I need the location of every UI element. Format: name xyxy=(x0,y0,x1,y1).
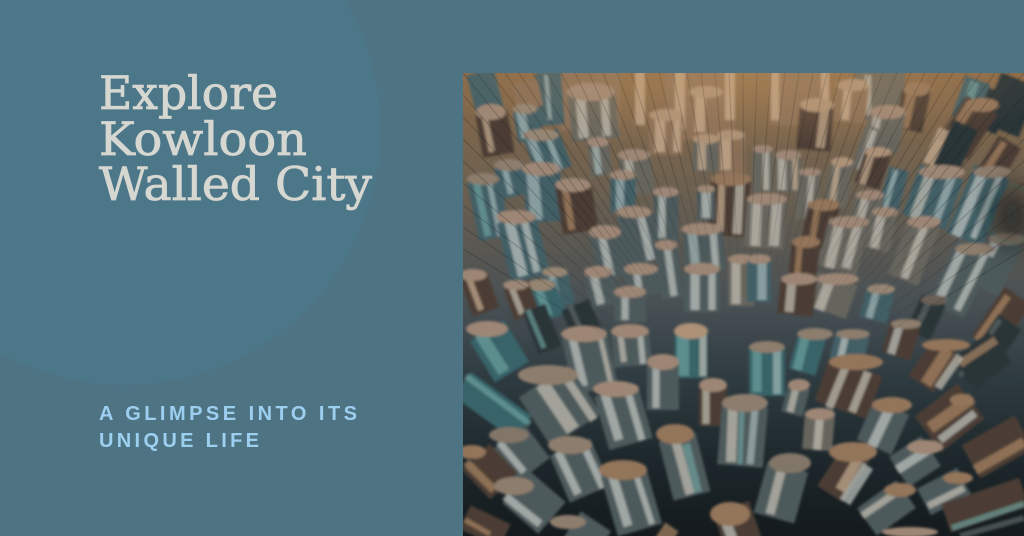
title: Kowloon xyxy=(99,112,307,166)
title xyxy=(99,66,372,211)
decorative background circle xyxy=(0,0,380,385)
title: Walled City xyxy=(99,157,372,211)
subtitle xyxy=(99,403,357,452)
subtitle: UNIQUE LIFE xyxy=(99,430,259,452)
photo: aerial view of dense high-rise towers xyxy=(458,70,1024,536)
subtitle: A GLIMPSE INTO ITS xyxy=(99,403,357,425)
title: Explore xyxy=(99,66,278,120)
